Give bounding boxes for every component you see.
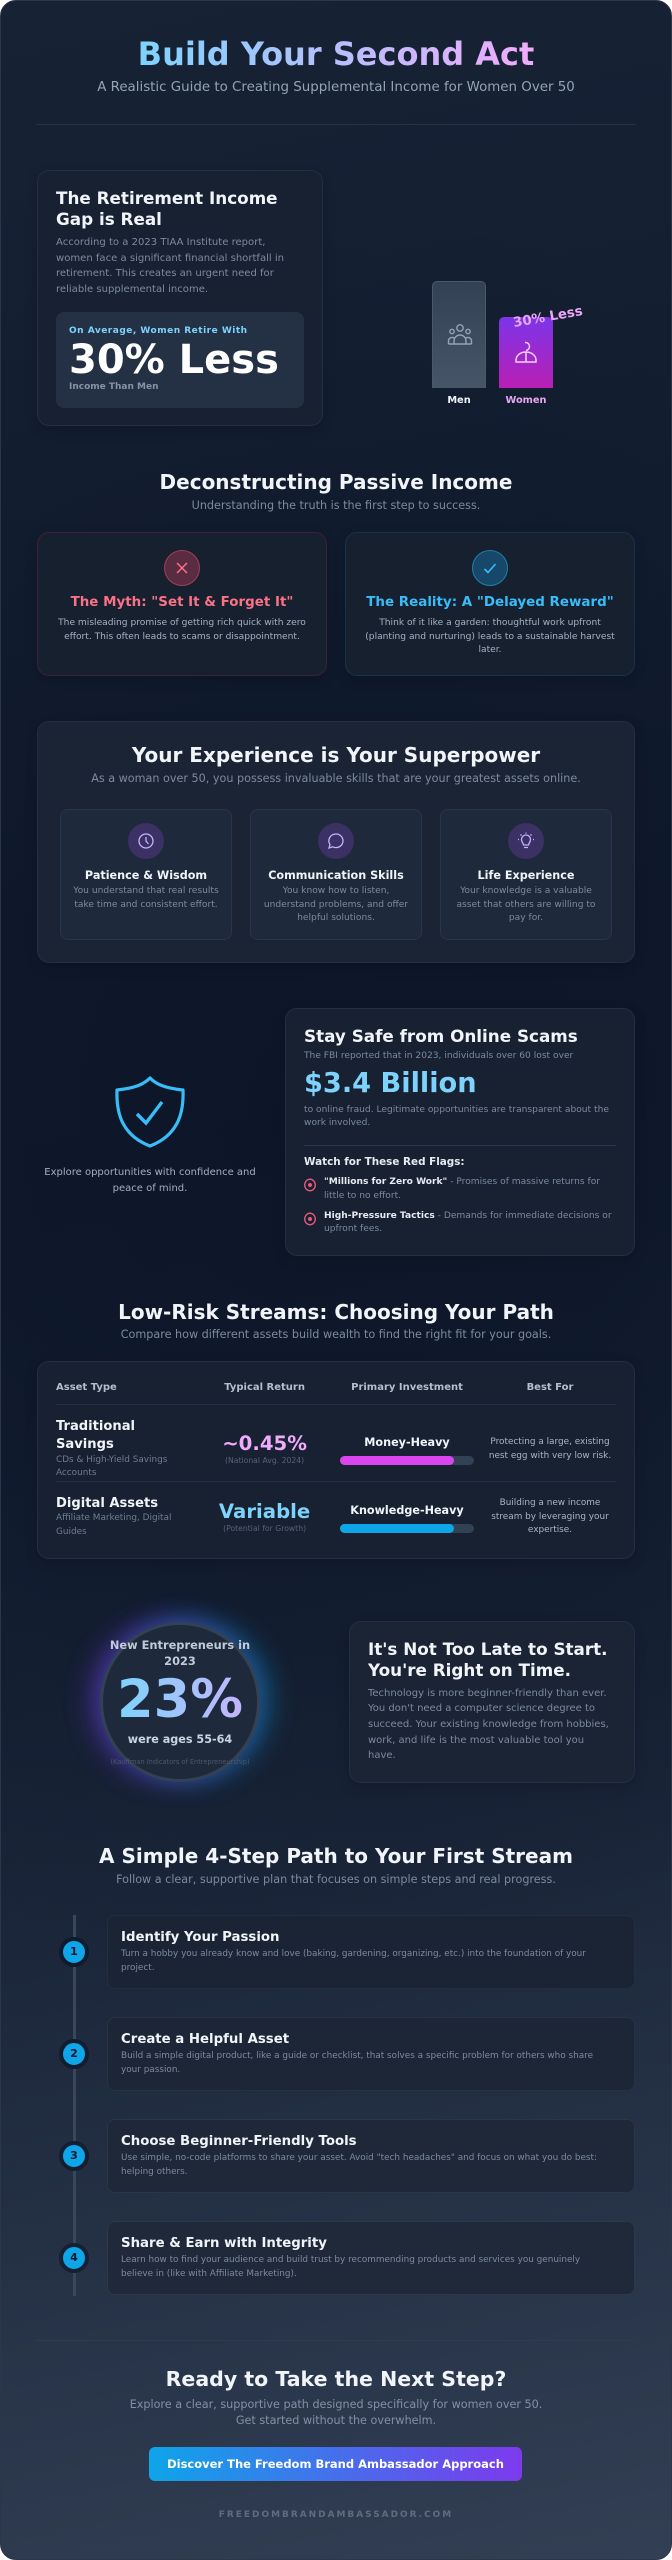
communication text: helpful solutions. bbox=[297, 913, 375, 923]
asset detail: Guides bbox=[56, 1527, 87, 1537]
step number 4: 4 bbox=[70, 2251, 78, 2264]
best for text bbox=[491, 1498, 609, 1535]
myth text: The misleading promise of getting rich quick with zero bbox=[58, 618, 306, 628]
red flag 2 bbox=[304, 1210, 612, 1234]
footer: website: FREEDOMBRANDAMBASSADOR.COM bbox=[219, 2510, 453, 2520]
step card 3 bbox=[107, 2119, 635, 2193]
reality text bbox=[365, 618, 615, 655]
step text: Use simple, no-code platforms to share your asset. Avoid "tech headaches" and focus on what you do best: bbox=[121, 2153, 597, 2163]
step 4 bbox=[59, 2221, 634, 2294]
step number 2: 2 bbox=[70, 2047, 78, 2060]
panel: superpower bbox=[37, 721, 635, 963]
heading: deconstructing: Deconstructing Passive Income bbox=[160, 470, 512, 494]
step card 1 bbox=[107, 1915, 635, 1989]
red flag text 2: High-Pressure Tactics - Demands for immediate decisions or bbox=[324, 1210, 612, 1220]
icon: clock bbox=[128, 823, 164, 859]
heading: retirement gap bbox=[56, 188, 278, 228]
step text bbox=[121, 2153, 597, 2177]
stat circle: 23% bbox=[100, 1622, 260, 1782]
heading: retirement gap: The Retirement Income bbox=[56, 188, 278, 208]
asset detail: CDs & High-Yield Savings bbox=[56, 1454, 167, 1464]
stat label: New Entrepreneurs in bbox=[110, 1638, 250, 1652]
stat number: 23% bbox=[117, 1669, 243, 1730]
communication heading: Communication Skills bbox=[268, 869, 404, 882]
panel: reality bbox=[345, 532, 635, 676]
skill card: life experience bbox=[440, 809, 612, 940]
step text: helping others. bbox=[121, 2167, 188, 2177]
best for text: stream by leveraging your bbox=[491, 1512, 609, 1522]
myth heading: The Myth: "Set It & Forget It" bbox=[71, 595, 293, 610]
timeline bbox=[59, 1915, 634, 2296]
reality text: (planting and nurturing) leads to a sustainable harvest bbox=[365, 632, 615, 642]
return note: (Potential for Growth) bbox=[223, 1524, 306, 1533]
text: not too late: have. bbox=[368, 1750, 396, 1761]
return value: Variable bbox=[219, 1500, 310, 1523]
icon: light bulb bbox=[508, 823, 544, 859]
text: not too late: work, and life is the most valuable tool you bbox=[368, 1735, 584, 1746]
subheading: 4-step: Follow a clear, supportive plan that focuses on simple steps and real progress. bbox=[116, 1872, 556, 1886]
best for text: Building a new income bbox=[500, 1498, 600, 1508]
bar: women bbox=[499, 317, 553, 388]
header: primary investment: Primary Investment bbox=[351, 1382, 463, 1393]
step text: Learn how to find your audience and build trust by recommending products and services you genuinely bbox=[121, 2255, 580, 2265]
scams text 2: work involved. bbox=[304, 1118, 370, 1128]
heading: low-risk: Low-Risk Streams: Choosing Your Path bbox=[118, 1300, 554, 1324]
step text: Build a simple digital product, like a guide or checklist, that solves a specific problem for others who share bbox=[121, 2051, 593, 2061]
shield caption bbox=[44, 1167, 256, 1194]
asset detail: Affiliate Marketing, Digital bbox=[56, 1513, 171, 1523]
best for text: nest egg with very low risk. bbox=[489, 1450, 611, 1460]
step 2 bbox=[59, 2017, 634, 2090]
asset name: Traditional bbox=[56, 1419, 135, 1434]
asset name: Savings bbox=[56, 1437, 114, 1452]
row: traditional savings bbox=[56, 1419, 611, 1478]
investment label: Knowledge-Heavy bbox=[350, 1504, 464, 1517]
icon: flag marker bbox=[304, 1178, 316, 1192]
step text bbox=[121, 2051, 593, 2075]
reality text: Think of it like a garden: thoughtful work upfront bbox=[379, 618, 601, 628]
text: retirement gap: reliable supplemental income. bbox=[56, 284, 208, 295]
communication text bbox=[264, 886, 408, 923]
callout: 30% less bbox=[56, 312, 304, 408]
step text: believe in (like with Affiliate Marketing). bbox=[121, 2269, 297, 2279]
comparison table bbox=[37, 1361, 635, 1559]
patience text: take time and consistent effort. bbox=[74, 900, 218, 910]
panel: myth bbox=[37, 532, 327, 676]
header: best for: Best For bbox=[527, 1382, 573, 1393]
icon: person bbox=[515, 342, 537, 363]
text: not too late: You don't need a computer science degree to bbox=[368, 1703, 595, 1714]
heading: not too late: It's Not Too Late to Start. bbox=[368, 1639, 608, 1659]
step number 1: 1 bbox=[70, 1945, 78, 1958]
panel: not too late bbox=[349, 1621, 635, 1783]
return value: ~0.45% bbox=[222, 1432, 307, 1455]
step text: your passion. bbox=[121, 2065, 180, 2075]
icon: flag marker bbox=[304, 1212, 316, 1226]
heading: not too late bbox=[368, 1639, 608, 1680]
superpower subheading: As a woman over 50, you possess invaluable skills that are your greatest assets online. bbox=[91, 772, 581, 785]
step 1 bbox=[59, 1915, 634, 1988]
step title: Share & Earn with Integrity bbox=[121, 2236, 327, 2251]
investment bar bbox=[340, 1456, 474, 1465]
step number 1 bbox=[59, 1937, 89, 1967]
stat caption: were ages 55-64 bbox=[128, 1733, 232, 1746]
stat label: 2023 bbox=[164, 1654, 196, 1668]
myth text: effort. This often leads to scams or disappointment. bbox=[64, 632, 300, 642]
life experience text: Your knowledge is a valuable bbox=[460, 886, 592, 896]
text: next step: Get started without the overwhelm. bbox=[236, 2414, 436, 2426]
step text bbox=[121, 2255, 580, 2279]
step 3 bbox=[59, 2119, 634, 2192]
best for text bbox=[489, 1437, 611, 1460]
best for text: Protecting a large, existing bbox=[490, 1437, 610, 1447]
life experience text bbox=[456, 886, 596, 923]
heading: not too late: You're Right on Time. bbox=[368, 1660, 571, 1680]
callout note: Income Than Men bbox=[69, 382, 159, 392]
life experience text: asset that others are willing to bbox=[456, 900, 596, 910]
text: next step: Explore a clear, supportive path designed specifically for women over 50. bbox=[130, 2398, 542, 2411]
text: retirement gap bbox=[56, 237, 284, 295]
text: next step bbox=[1, 2397, 671, 2428]
icon: people bbox=[448, 324, 472, 345]
patience text: You understand that real results bbox=[73, 886, 219, 896]
shield caption: peace of mind. bbox=[113, 1183, 187, 1194]
life experience text: pay for. bbox=[509, 913, 543, 923]
red flag text 1: "Millions for Zero Work" - Promises of massive returns for bbox=[324, 1177, 600, 1187]
text: retirement gap: women face a significant financial shortfall in bbox=[56, 253, 284, 264]
icon: x bbox=[164, 550, 200, 586]
return note: (National Avg. 2024) bbox=[225, 1456, 304, 1465]
step number 3 bbox=[59, 2141, 89, 2171]
asset detail bbox=[56, 1454, 167, 1478]
step card 2 bbox=[107, 2017, 635, 2091]
myth text bbox=[58, 618, 306, 642]
text: not too late: succeed. Your existing knowledge from hobbies, bbox=[368, 1719, 609, 1730]
label: women: Women bbox=[505, 395, 546, 406]
step title: Create a Helpful Asset bbox=[121, 2032, 289, 2047]
step title: Identify Your Passion bbox=[121, 1930, 280, 1945]
text: not too late bbox=[368, 1688, 609, 1761]
icon: chat bbox=[318, 823, 354, 859]
red flag 1 bbox=[304, 1177, 600, 1201]
life experience heading: Life Experience bbox=[478, 869, 574, 882]
red flag text 2: upfront fees. bbox=[324, 1224, 382, 1234]
red flag text 1 bbox=[324, 1177, 600, 1201]
communication text: You know how to listen, bbox=[283, 886, 389, 896]
callout label: On Average, Women Retire With bbox=[69, 326, 248, 336]
heading: next step: Ready to Take the Next Step? bbox=[166, 2367, 506, 2391]
patience heading: Patience & Wisdom bbox=[85, 869, 207, 882]
heading: retirement gap: Gap is Real bbox=[56, 208, 162, 228]
red flag text 2 bbox=[324, 1210, 612, 1234]
best for text: expertise. bbox=[528, 1525, 572, 1535]
row: digital assets bbox=[56, 1496, 609, 1537]
scams text 2: to online fraud. Legitimate opportunities are transparent about the bbox=[304, 1104, 609, 1114]
icon: shield bbox=[115, 1076, 185, 1148]
step text: project. bbox=[121, 1963, 155, 1973]
subtitle: A Realistic Guide to Creating Supplemental Income for Women Over 50 bbox=[97, 80, 575, 95]
patience text bbox=[73, 886, 219, 910]
button: call to action bbox=[149, 2447, 522, 2481]
shield caption: Explore opportunities with confidence and bbox=[44, 1167, 256, 1178]
investment label: Money-Heavy bbox=[364, 1436, 450, 1449]
stat label bbox=[110, 1638, 250, 1668]
bar chart: men vs women bbox=[432, 281, 584, 406]
asset detail: Accounts bbox=[56, 1468, 96, 1478]
subheading: low-risk: Compare how different assets build wealth to find the right fit for your goals. bbox=[121, 1328, 551, 1341]
header: asset type: Asset Type bbox=[56, 1382, 117, 1393]
panel: retirement income gap bbox=[37, 170, 323, 426]
scams stat: $3.4 Billion bbox=[304, 1068, 477, 1099]
reality heading: The Reality: A "Delayed Reward" bbox=[366, 595, 614, 610]
investment bar bbox=[340, 1524, 474, 1533]
panel: scams bbox=[285, 1008, 635, 1256]
icon: check bbox=[472, 550, 508, 586]
asset name: Digital Assets bbox=[56, 1496, 158, 1511]
stat source: (Kauffman Indicators of Entrepreneurship) bbox=[110, 1758, 250, 1766]
red flag text 1: little to no effort. bbox=[324, 1191, 401, 1201]
communication text: understand problems, and offer bbox=[264, 900, 408, 910]
text: not too late: Technology is more beginner-friendly than ever. bbox=[368, 1688, 607, 1698]
subheading: deconstructing: Understanding the truth is the first step to success. bbox=[192, 499, 480, 512]
header: typical return: Typical Return bbox=[224, 1382, 305, 1393]
button: call to action: Discover The Freedom Brand Ambassador Approach bbox=[167, 2457, 504, 2471]
step text bbox=[121, 1949, 586, 1973]
label: men: Men bbox=[447, 395, 471, 406]
callout number: 30% Less bbox=[69, 337, 279, 383]
skill card: patience bbox=[60, 809, 232, 940]
scams text 2 bbox=[304, 1104, 609, 1128]
bar: men bbox=[432, 281, 486, 388]
step number 4 bbox=[59, 2243, 89, 2273]
skill card: communication bbox=[250, 809, 422, 940]
superpower heading: Your Experience is Your Superpower bbox=[132, 743, 540, 767]
red flags heading: Watch for These Red Flags: bbox=[304, 1156, 465, 1168]
step card 4 bbox=[107, 2221, 635, 2295]
heading: 4-step: A Simple 4-Step Path to Your First Stream bbox=[99, 1844, 573, 1868]
scams text 1: The FBI reported that in 2023, individuals over 60 lost over bbox=[304, 1051, 573, 1061]
label: 30% less rotated: 30% Less bbox=[512, 304, 584, 331]
step title: Choose Beginner-Friendly Tools bbox=[121, 2134, 357, 2149]
scams heading: Stay Safe from Online Scams bbox=[304, 1026, 578, 1046]
step number 3: 3 bbox=[70, 2149, 78, 2162]
step text: Turn a hobby you already know and love (baking, gardening, organizing, etc.) into the foundation of your bbox=[121, 1949, 586, 1959]
reality text: later. bbox=[478, 645, 502, 655]
text: retirement gap: retirement. This creates an urgent need for bbox=[56, 268, 274, 279]
text: retirement gap: According to a 2023 TIAA Institute report, bbox=[56, 237, 265, 248]
title: Build Your Second Act bbox=[138, 35, 534, 73]
asset detail bbox=[56, 1513, 171, 1537]
asset name bbox=[56, 1419, 135, 1452]
step number 2 bbox=[59, 2039, 89, 2069]
